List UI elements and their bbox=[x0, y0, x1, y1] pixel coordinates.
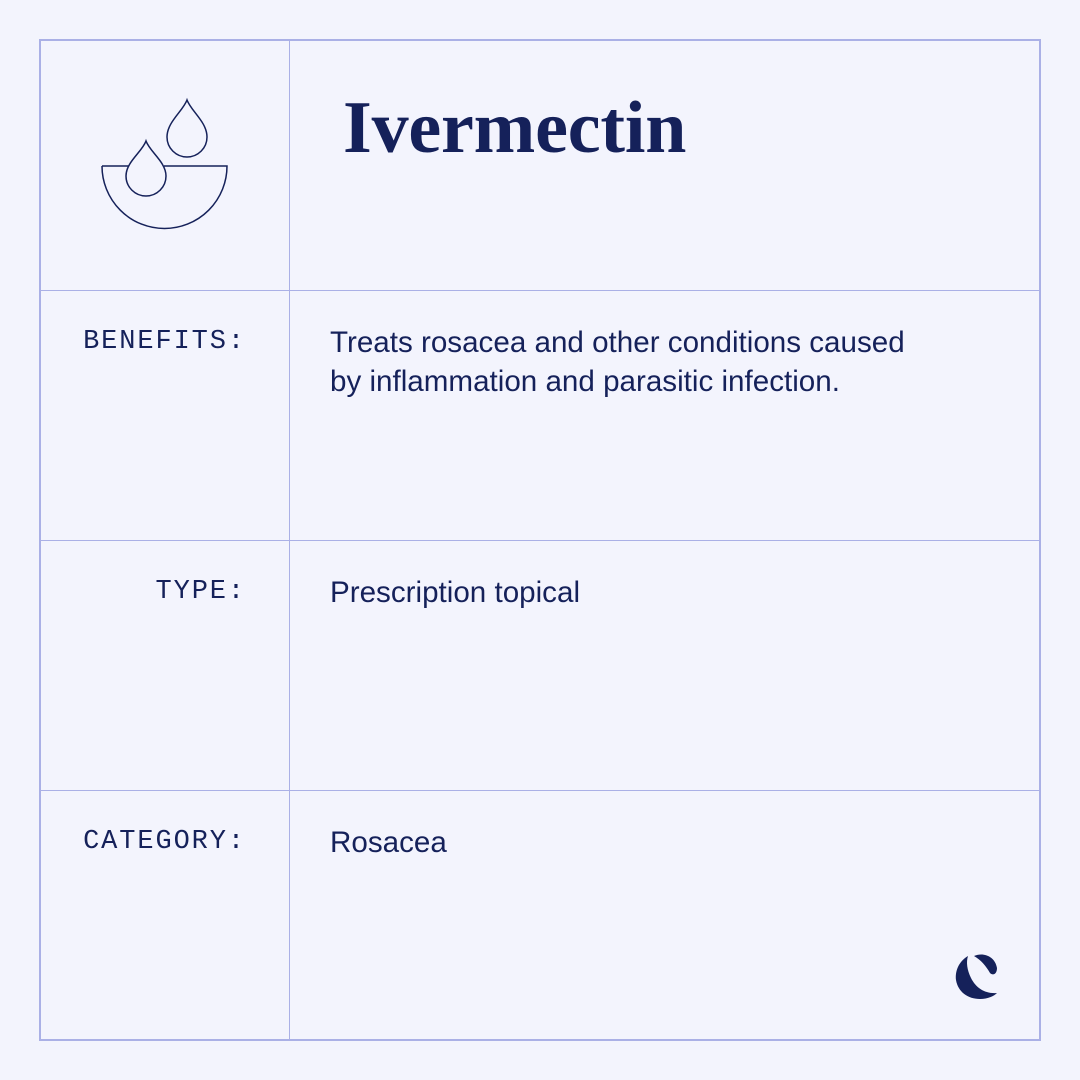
title: Ivermectin bbox=[343, 87, 686, 169]
icon: drops over bowl bbox=[101, 98, 228, 230]
text: benefits: by inflammation and parasitic infection. bbox=[330, 365, 840, 398]
text: benefits: Treats rosacea and other conditions caused bbox=[330, 326, 905, 359]
text: benefits bbox=[330, 326, 905, 398]
text: category: Rosacea bbox=[330, 826, 447, 859]
label: benefits: BENEFITS: bbox=[83, 327, 246, 357]
label: type: TYPE: bbox=[155, 577, 246, 607]
label: category: CATEGORY: bbox=[83, 827, 246, 857]
text: type: Prescription topical bbox=[330, 576, 580, 609]
logo bbox=[956, 954, 997, 999]
